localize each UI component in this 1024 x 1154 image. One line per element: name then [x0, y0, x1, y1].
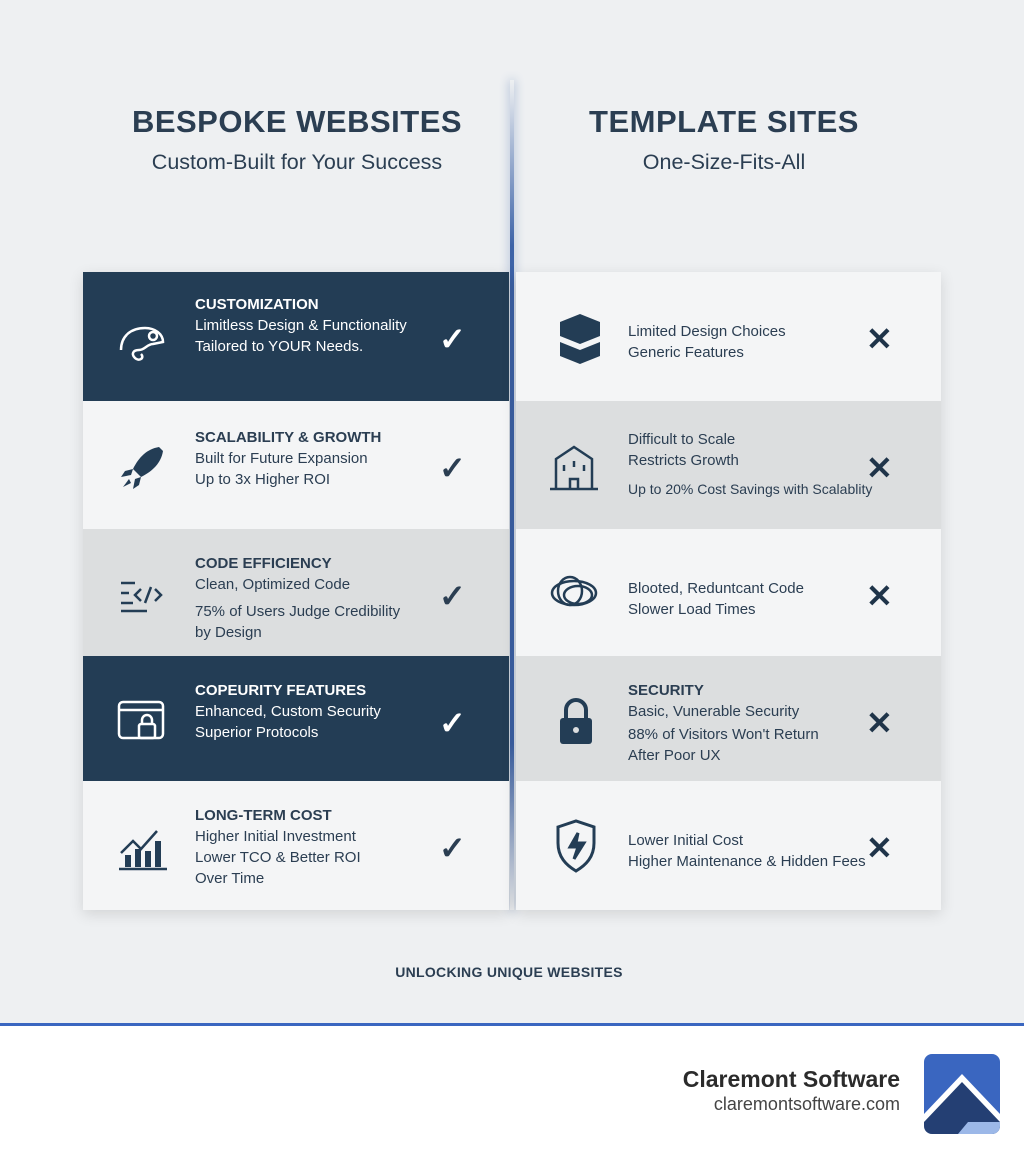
icon: check: ✓ [439, 321, 466, 357]
panel: template column [516, 272, 941, 910]
footer [0, 1023, 1024, 1154]
brand text [683, 1066, 900, 1114]
icon: x: ✕ [866, 830, 893, 866]
row: scalability [83, 401, 509, 530]
icon: code [121, 582, 163, 612]
heading: template: One-Size-Fits-All [643, 150, 805, 174]
row: security: Basic, Vunerable Security [628, 703, 799, 720]
heading: bespoke [132, 104, 462, 174]
icon: check: ✓ [439, 705, 466, 741]
row: cost: Higher Maintenance & Hidden Fees [628, 853, 866, 870]
row: long-term cost: Over Time [195, 870, 264, 887]
row: scale [516, 401, 941, 530]
icon: x: ✕ [866, 578, 893, 614]
row: cost: Lower Initial Cost [628, 832, 743, 849]
heading: template [589, 104, 859, 174]
row: scalability: Built for Future Expansion [195, 450, 368, 467]
row: code efficiency: Clean, Optimized Code [195, 576, 350, 593]
icon: x: ✕ [866, 705, 893, 741]
icon: x: ✕ [866, 450, 893, 486]
row: bloated code: Slower Load Times [628, 601, 756, 618]
row: long-term cost: Higher Initial Investment [195, 828, 356, 845]
icon: shield [556, 819, 596, 873]
icon: x: ✕ [866, 321, 893, 357]
row: cost [516, 781, 941, 910]
row: code efficiency [83, 529, 509, 658]
row: security: 88% of Visitors Won't Return [628, 726, 819, 743]
heading: template: TEMPLATE SITES [589, 104, 859, 139]
logo [924, 1054, 1000, 1134]
icon: building [550, 446, 598, 490]
heading: bespoke: Custom-Built for Your Success [152, 150, 442, 174]
row: limited design: Generic Features [628, 344, 744, 361]
heading: bespoke: BESPOKE WEBSITES [132, 104, 462, 139]
row: security [83, 656, 509, 781]
row: code efficiency: by Design [195, 624, 262, 641]
row: customization: Limitless Design & Functionality [195, 317, 407, 334]
row: security: SECURITY [628, 682, 704, 699]
icon: chart [119, 830, 167, 870]
row: security: Superior Protocols [195, 724, 318, 741]
row: scale: Difficult to Scale [628, 431, 735, 448]
row: limited design [516, 272, 941, 401]
row: scale: Up to 20% Cost Savings with Scalablity [628, 481, 872, 497]
icon: check: ✓ [439, 450, 466, 486]
icon: check: ✓ [439, 578, 466, 614]
brand text: Claremont Software [683, 1066, 900, 1092]
row: scalability: SCALABILITY & GROWTH [195, 429, 381, 446]
row: security: Enhanced, Custom Security [195, 703, 381, 720]
row: limited design: Limited Design Choices [628, 323, 786, 340]
row: long-term cost: LONG-TERM COST [195, 807, 332, 824]
row: customization: CUSTOMIZATION [195, 296, 319, 313]
divider line [510, 80, 514, 910]
row: code efficiency: 75% of Users Judge Credibility [195, 603, 400, 620]
icon: check: ✓ [439, 830, 466, 866]
row: code efficiency: CODE EFFICIENCY [195, 555, 332, 572]
row: bloated code: Blooted, Reduntcant Code [628, 580, 804, 597]
row: customization: Tailored to YOUR Needs. [195, 338, 363, 355]
brand text: claremontsoftware.com [714, 1094, 900, 1114]
row: scale: Restricts Growth [628, 452, 739, 469]
row: long-term cost [83, 781, 509, 910]
row: long-term cost: Lower TCO & Better ROI [195, 849, 361, 866]
row: bloated code [516, 529, 941, 658]
icon: browser lock [118, 700, 164, 740]
icon: padlock [560, 698, 592, 744]
row: customization [83, 272, 509, 401]
icon: boxes [560, 314, 600, 364]
row: security [516, 656, 941, 781]
row: scalability: Up to 3x Higher ROI [195, 471, 330, 488]
panel: bespoke column [83, 272, 509, 910]
icon: chameleon [120, 326, 164, 361]
row: security: After Poor UX [628, 747, 721, 764]
row: security: COPEURITY FEATURES [195, 682, 366, 699]
icon: rocket [121, 447, 163, 489]
caption: UNLOCKING UNIQUE WEBSITES [395, 964, 623, 980]
icon: tangle [550, 576, 598, 606]
